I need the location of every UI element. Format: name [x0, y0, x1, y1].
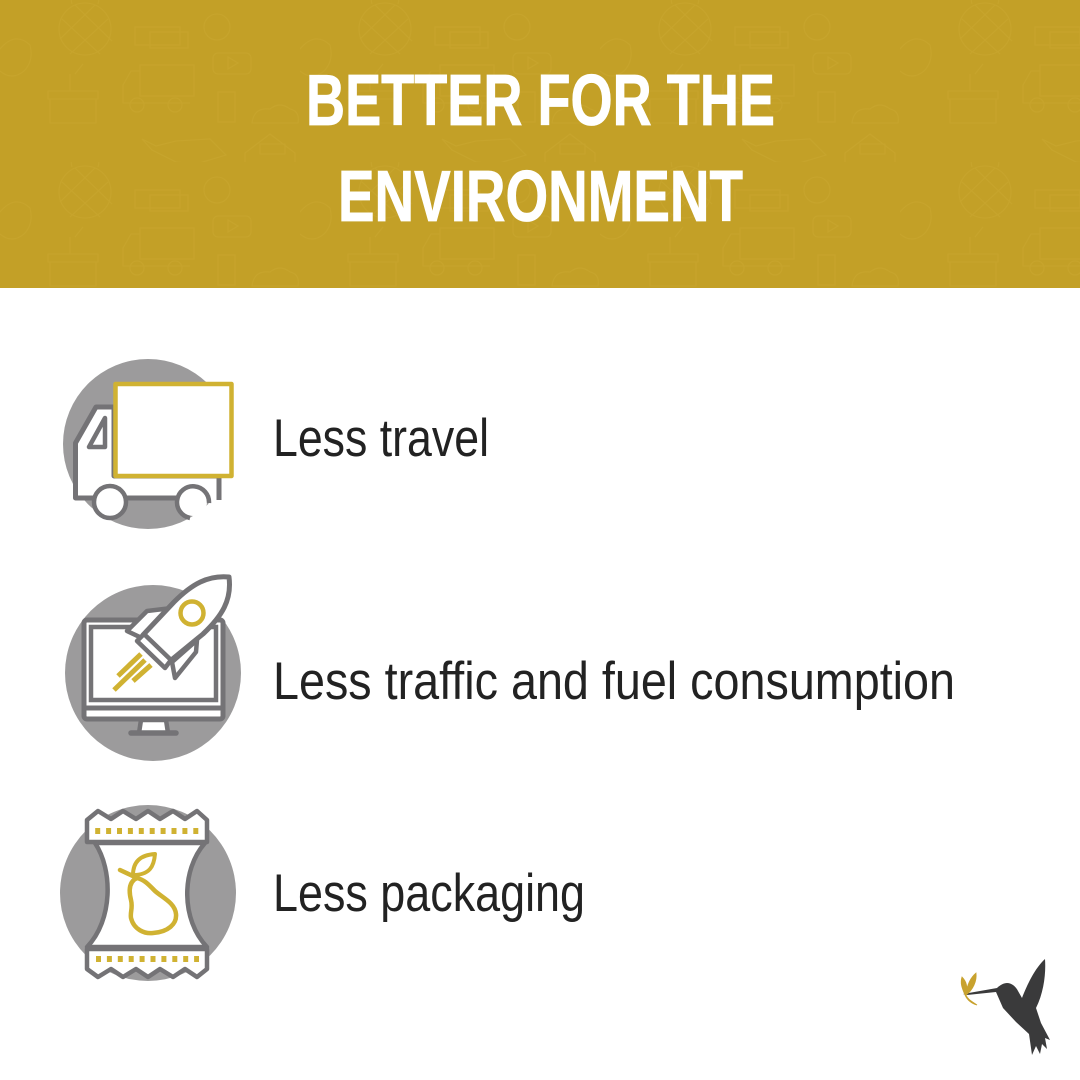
icon: rocket and monitor	[65, 577, 241, 761]
text: less travel: Less travel	[273, 409, 489, 468]
text: less traffic and fuel consumption: Less traffic and fuel consumption	[273, 652, 955, 711]
title: BETTER FOR THE	[306, 61, 775, 141]
header band	[0, 0, 1080, 288]
logo: hummingbird with twig	[961, 959, 1050, 1055]
title: ENVIRONMENT	[338, 157, 743, 237]
title	[306, 61, 775, 237]
icon: delivery truck	[63, 359, 233, 529]
text: less packaging: Less packaging	[273, 864, 585, 923]
icon: fruit packaging	[60, 805, 236, 981]
